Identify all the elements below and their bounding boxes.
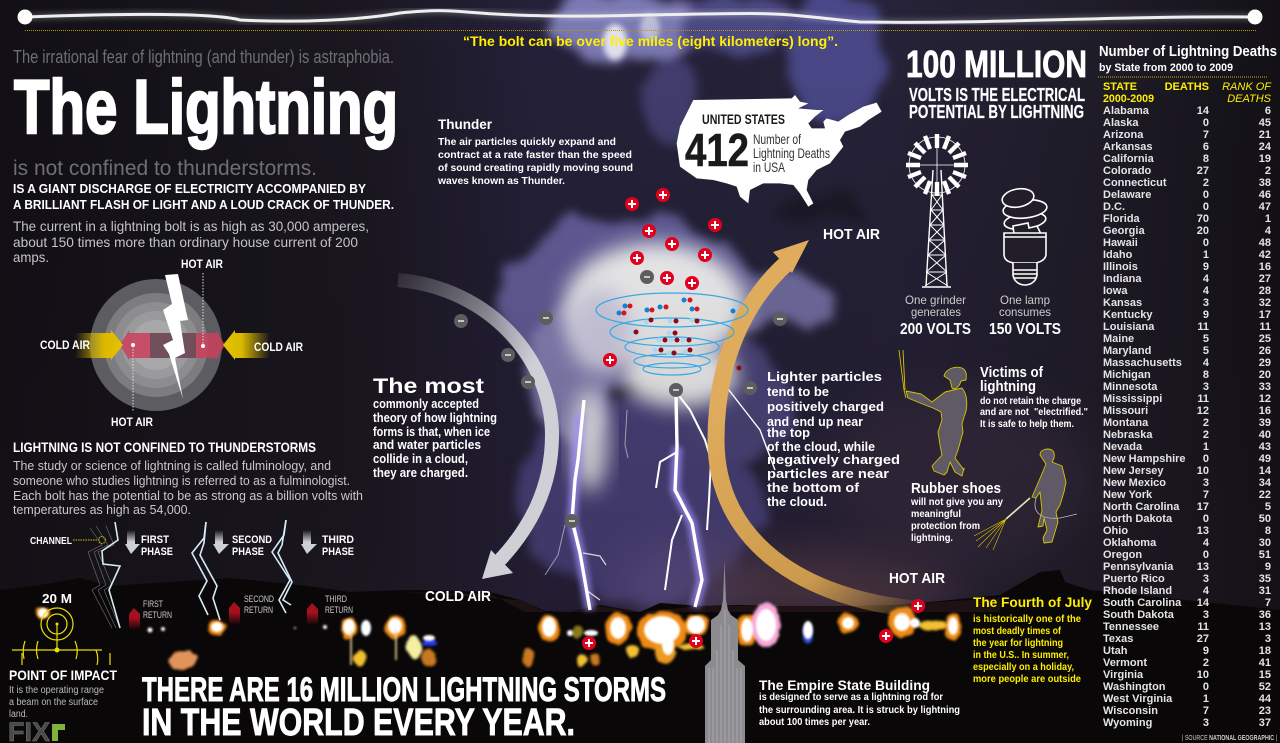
table: deaths by state: Texas [1103,633,1133,645]
table: deaths by state: Arizona [1103,129,1144,141]
third phase: PHASE [322,546,354,558]
first phase: FIRST [141,534,169,546]
table: deaths by state: 3 [1203,717,1209,729]
table: deaths by state: 10 [1197,669,1209,681]
table: deaths by state: 3 [1203,297,1209,309]
top bolt line [18,10,1262,24]
icon: lamp [1001,186,1048,285]
table: deaths by state: 25 [1259,333,1271,345]
victims text: do not retain the charge [980,396,1081,407]
table: deaths by state: 11 [1197,321,1209,333]
table: deaths by state: North Carolina [1103,501,1180,513]
lighter particles text: of the cloud, while [767,440,875,454]
point of impact: 20 M [42,591,72,606]
title: The Lightning [14,65,398,150]
table: deaths by state: 2 [1203,429,1209,441]
table: deaths by state: Minnesota [1103,381,1158,393]
theory text: collide in a cloud, [373,452,468,466]
lighter particles text [767,370,900,509]
table: deaths by state: Oregon [1103,549,1142,561]
table: deaths by state: 43 [1259,441,1271,453]
first return: FIRST [143,599,163,610]
table: deaths by state: STATE [1103,81,1137,93]
table: deaths by state: Nebraska [1103,429,1153,441]
thunder text: contract at a rate faster than the speed [438,149,632,161]
voltage captions: consumes [999,305,1051,319]
first return: RETURN [143,610,172,621]
table: deaths by state: 17 [1197,501,1209,513]
table: deaths by state: 2 [1203,177,1209,189]
rubber shoes text [910,480,1003,544]
table: deaths by state: 0 [1203,189,1209,201]
theory text: forms is that, when ice [373,425,490,439]
table: deaths by state: 52 [1259,681,1271,693]
point of impact [9,591,117,720]
table: deaths by state: D.C. [1103,201,1125,213]
point of impact: POINT OF IMPACT [9,667,117,683]
diagram: hot and cold air around bolt: HOT AIR [181,257,223,271]
table: deaths by state: 39 [1259,417,1271,429]
table: deaths by state: Rhode Island [1103,585,1172,597]
table: deaths by state: Missouri [1103,405,1148,417]
table: deaths by state: 20 [1259,369,1271,381]
table: deaths by state: 26 [1259,345,1271,357]
rubber shoes text: protection from [911,521,980,532]
table: deaths by state: Ohio [1103,525,1128,537]
diagram: hot and cold air around bolt [40,257,303,429]
table: deaths by state: 5 [1203,333,1209,345]
table: deaths by state: 8 [1203,153,1209,165]
air labels: HOT AIR [823,226,880,243]
table: deaths by state: Michigan [1103,369,1151,381]
table: deaths by state: New Mexico [1103,477,1166,489]
table: deaths by state: Massachusetts [1103,357,1182,369]
table: deaths by state: 49 [1259,453,1271,465]
table: deaths by state: 50 [1259,513,1271,525]
table: deaths by state: 8 [1265,525,1271,537]
phases diagram [30,520,354,630]
figure: victim with raised arm [899,350,967,476]
first phase [125,530,173,558]
table: deaths by state: 7 [1265,597,1271,609]
voltage heading: 100 MILLION [906,44,1087,86]
second phase: SECOND [232,534,272,546]
table: deaths by state: 1 [1265,213,1271,225]
voltage captions: generates [911,305,961,319]
table: deaths by state: DEATHS [1227,93,1272,105]
figure: person with spray wand [974,449,1077,550]
table: deaths by state: 70 [1197,213,1209,225]
table: deaths by state: 34 [1259,477,1272,489]
table: deaths by state: 16 [1259,405,1271,417]
victims text: lightning [980,378,1036,395]
map: united states 412 deaths: Lightning Deaths [753,145,830,161]
table: deaths by state: DEATHS [1165,81,1209,93]
fourth of july text: most deadly times of [973,626,1062,637]
table: deaths by state: Wisconsin [1103,705,1158,717]
lighter particles text: the cloud. [767,495,827,509]
table: deaths by state: South Dakota [1103,609,1175,621]
table: deaths by state: South Carolina [1103,597,1182,609]
diagram: hot and cold air around bolt: COLD AIR [40,338,90,352]
theory text [373,375,497,480]
table: deaths by state: 7 [1203,705,1209,717]
negative charges [454,270,787,528]
table: deaths by state: Pennsylvania [1103,561,1174,573]
table: deaths by state: 18 [1259,645,1271,657]
voltage heading: VOLTS IS THE ELECTRICAL [909,85,1085,105]
table: deaths by state: 9 [1203,645,1209,657]
fourth of july text [973,594,1092,685]
table: deaths by state: 0 [1203,117,1209,129]
table: deaths by state: 4 [1203,357,1210,369]
fourth of july text: more people are outside [973,674,1081,685]
fulminology text: The study or science of lightning is called fulminology, and [13,458,331,473]
table: deaths by state: Mississippi [1103,393,1162,405]
table: deaths by state: 42 [1259,249,1271,261]
lighter particles text: and end up near [767,415,863,429]
table: deaths by state: 6 [1265,105,1271,117]
table: deaths by state: 9 [1265,561,1271,573]
intro heading block: IS A GIANT DISCHARGE OF ELECTRICITY ACCOMPANIED BY [13,181,366,196]
table: deaths by state: Tennessee [1103,621,1159,633]
table: deaths by state: 11 [1197,621,1209,633]
victims text [980,364,1088,430]
table: deaths by state: 9 [1203,309,1209,321]
empire state text: is designed to serve as a lightning rod for [759,692,943,703]
third return [307,594,353,625]
theory text: and water particles [373,438,481,452]
table: deaths by state: 31 [1259,585,1271,597]
table: deaths by state: 13 [1197,525,1209,537]
fulminology text: temperatures as high as 54,000. [13,502,191,517]
table: deaths by state: Iowa [1103,285,1128,297]
bolt quote: “The bolt can be over five miles (eight kilometers) long”. [463,33,838,49]
table: deaths by state: 40 [1259,429,1271,441]
empire state building [705,560,745,743]
rubber shoes text: lightning. [911,533,953,544]
fourth of july text: especially on a holiday, [973,662,1074,673]
thunder text: of sound creating rapidly moving sound [438,162,633,174]
table: deaths by state: 13 [1259,621,1271,633]
table: deaths by state: Oklahoma [1103,537,1157,549]
thunder text [437,116,633,187]
table: deaths by state: 32 [1259,297,1271,309]
table: deaths by state: Montana [1103,417,1149,429]
third return: RETURN [325,605,353,616]
table: deaths by state: 17 [1259,309,1271,321]
table: deaths by state: Louisiana [1103,321,1155,333]
empire state text: The Empire State Building [759,677,930,693]
lighter particles text: the bottom of [767,481,860,495]
headline: 16 million storms: THERE ARE 16 MILLION LIGHTNING STORMS [142,671,666,709]
table: deaths by state: RANK OF [1222,81,1272,93]
victims text: and are not "electrified." [980,407,1088,418]
table: deaths by state: 36 [1259,609,1271,621]
table: deaths by state: 4 [1203,273,1210,285]
empire state text: the surrounding area. It is struck by lightning [759,705,960,716]
table: deaths by state: 4 [1203,285,1210,297]
theory text: commonly accepted [373,397,479,411]
table: deaths by state: 47 [1259,201,1271,213]
point of impact: It is the operating range [9,685,104,696]
second return [229,594,274,625]
point of impact: land. [9,709,28,720]
table: deaths by state: 22 [1259,489,1271,501]
table: deaths by state: 44 [1259,693,1272,705]
icon: windmill [906,134,968,287]
table: deaths by state: Florida [1103,213,1141,225]
intro heading block: about 150 times more than ordinary house current of 200 [13,234,358,250]
bolt [163,274,188,399]
table: deaths by state: 7 [1203,129,1209,141]
table: deaths by state: Alaska [1103,117,1139,129]
table: deaths by state: Connecticut [1103,177,1167,189]
map: united states 412 deaths: UNITED STATES [702,111,785,127]
map: united states 412 deaths: 412 [685,124,749,176]
table: deaths by state: 13 [1197,561,1209,573]
table: deaths by state: California [1103,153,1155,165]
table: deaths by state: West Virginia [1103,693,1173,705]
table: deaths by state: Colorado [1103,165,1152,177]
table: deaths by state: 30 [1259,537,1271,549]
table: deaths by state: Puerto Rico [1103,573,1165,585]
intro heading block: The irrational fear of lightning (and thunder) is astraphobia. [13,47,394,67]
hot air arrow [716,240,925,610]
fourth of july text: The Fourth of July [973,594,1092,610]
table: deaths by state: 16 [1259,261,1271,273]
table: deaths by state: 0 [1203,513,1209,525]
third return: THIRD [325,594,347,605]
table: deaths by state: Virginia [1103,669,1144,681]
lighter particles text: Lighter particles [767,370,882,384]
table: deaths by state: 21 [1259,129,1271,141]
lighter particles text: particles are near [767,467,889,481]
table: deaths by state: 7 [1203,489,1209,501]
table: deaths by state: Georgia [1103,225,1145,237]
point of impact: a beam on the surface [9,697,98,708]
intro heading block [13,47,398,265]
table: deaths by state: 5 [1265,501,1271,513]
air labels: COLD AIR [425,588,491,605]
table: deaths by state: 27 [1197,165,1209,177]
table: deaths by state: New Hampshire [1103,453,1186,465]
voltage captions: One grinder [905,293,966,307]
table: deaths by state: 38 [1259,177,1271,189]
voltage captions [900,293,1061,338]
table: deaths by state: Indiana [1103,273,1142,285]
table: deaths by state: 6 [1203,141,1209,153]
intro heading block: The current in a lightning bolt is as high as 30,000 amperes, [13,218,369,234]
table: deaths by state: 20 [1197,225,1209,237]
table: deaths by state: 4 [1203,585,1210,597]
fulminology text: LIGHTNING IS NOT CONFINED TO THUNDERSTORMS [13,439,316,455]
empire state text [759,677,960,728]
table: deaths by state: 1 [1203,441,1209,453]
table: deaths by state: 3 [1265,633,1271,645]
table: deaths by state: 24 [1259,141,1272,153]
table: deaths by state: 12 [1259,393,1271,405]
table: deaths by state: 3 [1203,477,1209,489]
table: deaths by state: 8 [1203,369,1209,381]
table: deaths by state: New Jersey [1103,465,1164,477]
table: deaths by state: 4 [1265,225,1272,237]
table: deaths by state: 3 [1203,573,1209,585]
cold air arrow [398,280,552,579]
second phase: PHASE [232,546,264,558]
table: deaths by state [1098,43,1277,729]
lighter particles text: negatively charged [767,453,900,467]
table: deaths by state: Maryland [1103,345,1151,357]
table: deaths by state: 27 [1259,273,1271,285]
map: united states 412 deaths: in USA [753,159,785,175]
table: deaths by state: 1 [1203,249,1209,261]
table: deaths by state: 45 [1259,117,1271,129]
table: deaths by state: 2 [1203,657,1209,669]
fulminology text [13,439,363,517]
table: deaths by state: Kentucky [1103,309,1153,321]
table: deaths by state: 23 [1259,705,1271,717]
victims text: It is safe to help them. [980,419,1074,430]
lightning bolts in photo [545,385,775,610]
table: deaths by state: 0 [1203,453,1209,465]
third phase [301,530,354,558]
table: deaths by state: Utah [1103,645,1128,657]
table: deaths by state: Arkansas [1103,141,1153,153]
table: deaths by state: 4 [1203,537,1210,549]
voltage captions: One lamp [1000,293,1050,307]
table: deaths by state: 33 [1259,381,1271,393]
air labels: HOT AIR [889,570,945,587]
headline: 16 million storms [142,671,666,743]
table: deaths by state: 0 [1203,237,1209,249]
table: deaths by state: 1 [1203,693,1209,705]
table: deaths by state: 19 [1259,153,1271,165]
table: deaths by state: 28 [1259,285,1271,297]
table: deaths by state: 3 [1203,381,1209,393]
headline: 16 million storms: IN THE WORLD EVERY YEAR. [142,702,575,743]
table: deaths by state: New York [1103,489,1153,501]
table: deaths by state: Hawaii [1103,237,1138,249]
first phase: PHASE [141,546,173,558]
voltage heading: POTENTIAL BY LIGHTNING [909,102,1084,122]
table: deaths by state: 0 [1203,681,1209,693]
empire state text: about 100 times per year. [759,717,870,728]
table: deaths by state: 37 [1259,717,1271,729]
fourth of july text: is historically one of the [973,614,1081,625]
fourth of july text: the year for lightning [973,638,1063,649]
table: deaths by state: 3 [1203,609,1209,621]
lighter particles text: the top [767,426,810,440]
table: deaths by state: 51 [1259,549,1271,561]
fourth of july text: in the U.S.. In summer, [973,650,1069,661]
phases diagram: CHANNEL [30,536,72,547]
table: deaths by state: Idaho [1103,249,1133,261]
voltage heading [906,44,1087,122]
table: deaths by state: 27 [1197,633,1209,645]
table: deaths by state: Delaware [1103,189,1151,201]
thunder text: The air particles quickly expand and [438,136,616,148]
table: deaths by state: Wyoming [1103,717,1152,729]
table: deaths by state: 0 [1203,549,1209,561]
second return: SECOND [244,594,274,605]
voltage captions: 200 VOLTS [900,321,971,338]
lighter particles text: tend to be [767,385,829,399]
thunder text: Thunder [438,116,493,132]
city lights [36,603,961,670]
table: deaths by state: 29 [1259,357,1271,369]
table: deaths by state: 2000-2009 [1103,93,1154,105]
table: deaths by state: Vermont [1103,657,1147,669]
lighter particles text: positively charged [767,400,884,414]
positive charges [582,188,925,650]
intro heading block: is not confined to thunderstorms. [13,157,317,180]
thunder text: waves known as Thunder. [437,175,565,187]
table: deaths by state: 2 [1265,165,1271,177]
victims text: Victims of [980,364,1044,381]
table: deaths by state: 48 [1259,237,1271,249]
table: deaths by state: Kansas [1103,297,1142,309]
fulminology text: someone who studies lightning is referred to as a fulminologist. [13,473,350,488]
table: deaths by state: 5 [1203,345,1209,357]
table: deaths by state: Nevada [1103,441,1143,453]
table: deaths by state: 14 [1197,597,1210,609]
diagram: hot and cold air around bolt: COLD AIR [254,340,303,354]
first return [129,599,172,630]
second return: RETURN [244,605,273,616]
table: deaths by state: Alabama [1103,105,1150,117]
table: deaths by state: 46 [1259,189,1271,201]
table: deaths by state: 14 [1259,465,1272,477]
table: deaths by state: 10 [1197,465,1209,477]
voltage captions: 150 VOLTS [989,321,1061,338]
table: deaths by state: 11 [1259,321,1271,333]
table: deaths by state: Maine [1103,333,1134,345]
third phase: THIRD [322,534,354,546]
rubber shoes text: will not give you any [910,497,1003,508]
diagram: hot and cold air around bolt: HOT AIR [111,415,153,429]
table: deaths by state: 12 [1197,405,1209,417]
charged cloud rings and particles [596,293,748,375]
table: deaths by state: 2 [1203,417,1209,429]
rubber shoes text: meaningful [911,509,961,520]
rubber shoes text: Rubber shoes [911,480,1001,497]
table: deaths by state: 41 [1259,657,1271,669]
air labels [425,226,945,605]
map: united states 412 deaths [677,95,882,207]
table: deaths by state: 35 [1259,573,1271,585]
theory text: they are charged. [373,466,468,480]
map: united states 412 deaths: Number of [753,131,801,147]
table: deaths by state: 15 [1259,669,1271,681]
table: deaths by state: 14 [1197,105,1210,117]
theory text: The most [373,375,484,398]
table: deaths by state: by State from 2000 to 2009 [1099,62,1233,74]
intro heading block: A BRILLIANT FLASH OF LIGHT AND A LOUD CRACK OF THUNDER. [13,197,394,212]
table: deaths by state: Illinois [1103,261,1138,273]
table: deaths by state: 9 [1203,261,1209,273]
table: deaths by state: Washington [1103,681,1166,693]
theory text: theory of how lightning [373,411,497,425]
intro heading block: amps. [13,249,49,265]
table: deaths by state: 11 [1197,393,1209,405]
second phase [213,530,272,558]
table: deaths by state: North Dakota [1103,513,1173,525]
table: deaths by state: 0 [1203,201,1209,213]
fulminology text: Each bolt has the potential to be as strong as a billion volts with [13,488,363,503]
